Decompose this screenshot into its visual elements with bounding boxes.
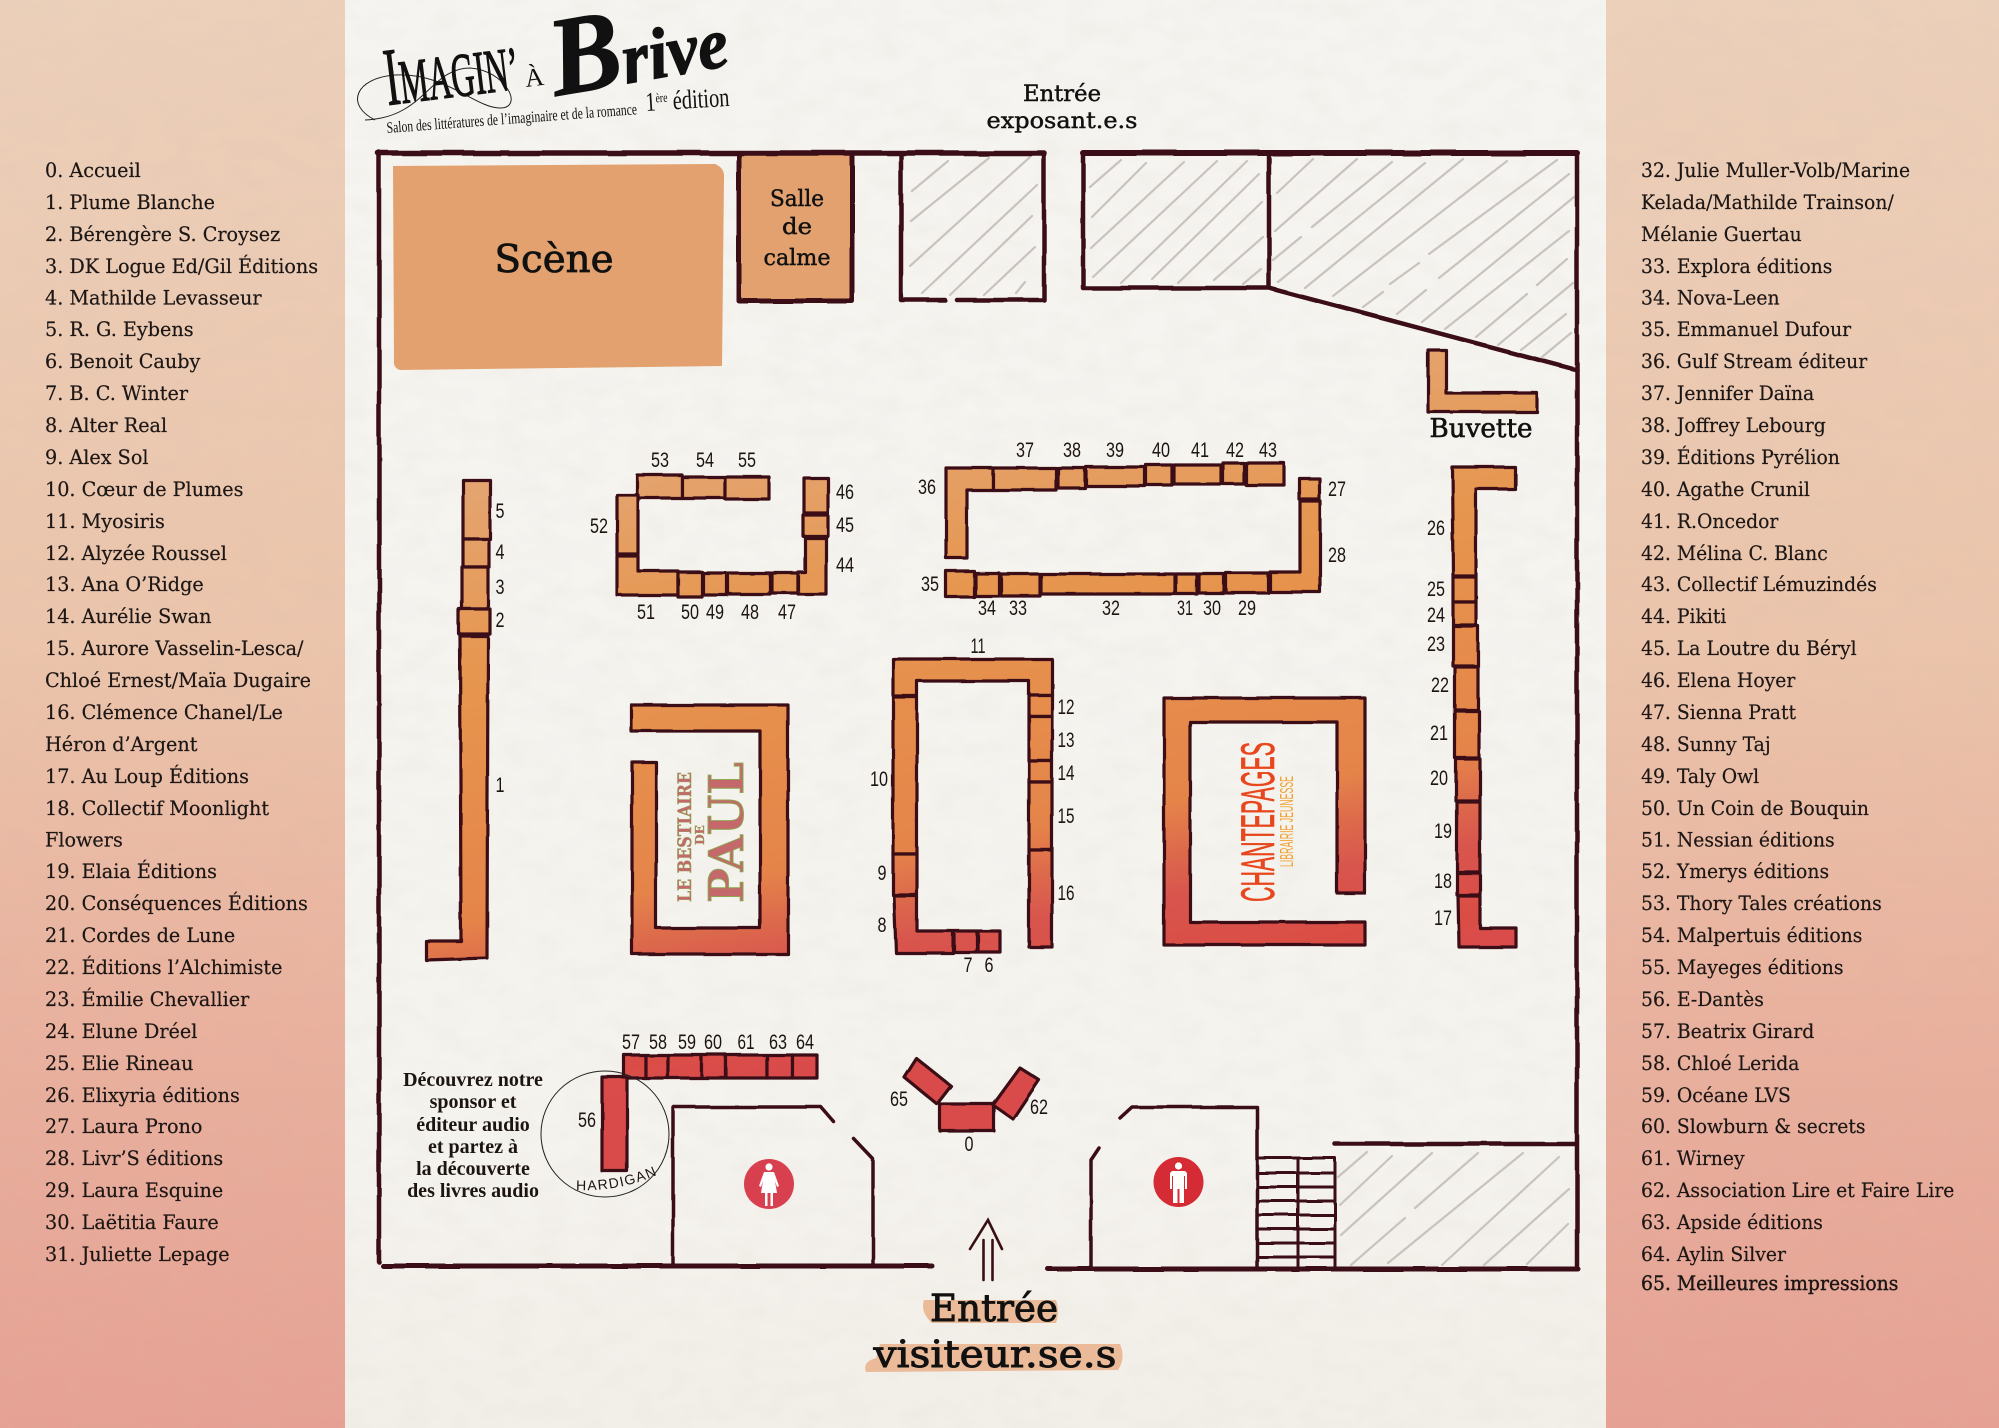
numbers: 55 <box>738 449 756 472</box>
partner booth: chantepages: CHANTEPAGES <box>1231 742 1284 902</box>
logo: Imagin': IMAGIN’ <box>379 18 523 124</box>
numbers: 14 <box>1058 762 1075 785</box>
numbers: 8 <box>878 914 886 937</box>
booths <box>1452 467 1516 947</box>
booth cluster: 44 to 55 <box>590 449 854 624</box>
numbers: 46 <box>836 481 854 504</box>
legend: right column: 43. Collectif Lémuzindés <box>1641 572 1877 596</box>
legend: left column: 22. Éditions l’Alchimiste <box>45 955 282 979</box>
numbers: 15 <box>1058 805 1074 828</box>
booths <box>617 475 828 597</box>
legend: right column: 56. E-Dantès <box>1641 987 1764 1011</box>
legend: left column: 18. Collectif Moonlight <box>45 797 269 820</box>
legend: left column: 26. Elixyria éditions <box>45 1084 240 1107</box>
legend: left column: Héron d’Argent <box>45 733 198 756</box>
legend: right column: 61. Wirney <box>1641 1146 1745 1170</box>
numbers <box>578 1031 814 1132</box>
panel: scène <box>393 164 724 370</box>
numbers: 38 <box>1063 439 1081 462</box>
numbers: 37 <box>1016 439 1034 462</box>
logo: subtitle: Salon des littératures de l’imaginaire et de la romance <box>386 101 638 137</box>
legend: left column: 11. Myosiris <box>45 510 165 533</box>
heading: entrée exposant: Entrée <box>1023 82 1101 107</box>
numbers: 51 <box>637 601 655 624</box>
logo: edition: ère <box>655 90 668 105</box>
numbers: 60 <box>704 1031 722 1054</box>
numbers: 9 <box>878 862 886 885</box>
icon: women's toilets <box>744 1159 794 1209</box>
legend: left column: 30. Laëtitia Faure <box>45 1211 219 1234</box>
booth outline <box>1164 698 1365 945</box>
numbers: 56 <box>578 1109 596 1132</box>
panel: salle de calme: calme <box>764 246 830 271</box>
legend: left column: 3. DK Logue Ed/Gil Éditions <box>45 254 318 278</box>
numbers: 64 <box>796 1031 814 1054</box>
numbers: 6 <box>984 954 994 977</box>
legend: left column: 24. Elune Dréel <box>45 1020 197 1043</box>
numbers: 59 <box>678 1031 696 1054</box>
legend: right column: 36. Gulf Stream éditeur <box>1641 349 1868 373</box>
legend: right column: Kelada/Mathilde Trainson/ <box>1641 190 1894 214</box>
icon: men's toilets <box>1154 1157 1204 1207</box>
numbers: 31 <box>1177 597 1193 620</box>
legend: right column: 57. Beatrix Girard <box>1641 1019 1814 1043</box>
numbers: 24 <box>1427 604 1445 627</box>
highlight second <box>865 1344 1123 1372</box>
numbers: 36 <box>918 476 936 499</box>
legend: left column: 16. Clémence Chanel/Le <box>45 701 283 724</box>
legend: left column: 10. Cœur de Plumes <box>45 478 243 501</box>
numbers: 47 <box>778 601 796 624</box>
heading: entrée exposant: exposant.e.s <box>986 109 1138 134</box>
numbers: 35 <box>921 573 939 596</box>
legend: right column <box>1641 158 1954 1295</box>
numbers: 2 <box>496 609 504 632</box>
numbers: 18 <box>1434 870 1452 893</box>
numbers <box>918 439 1346 620</box>
legend: right column: 52. Ymerys éditions <box>1641 859 1829 883</box>
legend: right column: 39. Éditions Pyrélion <box>1641 445 1840 469</box>
legend: left column: 15. Aurore Vasselin-Lesca/ <box>45 637 304 660</box>
heading: entrée visiteur <box>865 1287 1123 1376</box>
panel: scène: Scène <box>494 237 614 281</box>
visitor entrance text: Entrée <box>930 1287 1058 1330</box>
legend: left column: 4. Mathilde Levasseur <box>45 286 262 310</box>
legend: left column: 9. Alex Sol <box>45 446 149 469</box>
logo: infinity loop <box>358 68 511 120</box>
legend: right column: 47. Sienna Pratt <box>1641 700 1796 724</box>
hatched closed areas <box>910 157 1574 1265</box>
legend: right column: 40. Agathe Crunil <box>1641 477 1810 501</box>
numbers: 41 <box>1191 439 1209 462</box>
numbers: 11 <box>970 635 986 658</box>
numbers: 27 <box>1328 478 1346 501</box>
logo: de: DE <box>693 825 707 845</box>
booth cluster: 27 to 43 <box>918 439 1346 620</box>
highlight strokes <box>923 1300 1058 1323</box>
legend: left column: 13. Ana O’Ridge <box>45 573 204 596</box>
numbers: 12 <box>1058 696 1074 719</box>
booths <box>904 1058 1039 1131</box>
callout: sponsor text: la découverte <box>416 1158 530 1180</box>
booth cluster: 56 to 64 <box>578 1031 817 1171</box>
legend: left column <box>45 159 318 1266</box>
legend: right column: 34. Nova-Leen <box>1641 286 1780 310</box>
buvette label: Buvette <box>1430 414 1532 444</box>
legend: right column: 48. Sunny Taj <box>1641 732 1771 756</box>
legend: right column: 37. Jennifer Daïna <box>1641 381 1815 405</box>
callout: hardigan sponsor circle: HARDIGAN <box>577 1166 656 1190</box>
legend: right column: 55. Mayeges éditions <box>1641 955 1843 979</box>
legend: right column: 58. Chloé Lerida <box>1641 1051 1800 1075</box>
numbers: 28 <box>1328 544 1346 567</box>
heading: entrée exposant <box>986 82 1138 134</box>
callout: sponsor text <box>403 1069 543 1202</box>
numbers: 63 <box>769 1031 787 1054</box>
callout: sponsor text: éditeur audio <box>416 1114 530 1136</box>
booth cluster: buvette <box>1428 350 1537 444</box>
legend: right column: 32. Julie Muller-Volb/Marine <box>1641 158 1910 182</box>
numbers: 0 <box>964 1133 974 1156</box>
booths <box>946 463 1320 597</box>
numbers: 16 <box>1058 882 1074 905</box>
numbers: 19 <box>1434 820 1452 843</box>
legend: left column: 29. Laura Esquine <box>45 1179 223 1202</box>
logo <box>358 0 736 137</box>
numbers <box>890 1088 1048 1156</box>
numbers: 5 <box>496 500 504 523</box>
partner booth: chantepages <box>1164 698 1365 945</box>
legend: left column: 27. Laura Prono <box>45 1115 202 1138</box>
booth cluster: 17 to 26 <box>1427 467 1516 947</box>
numbers: 34 <box>978 597 996 620</box>
numbers: 49 <box>706 601 724 624</box>
numbers: 7 <box>964 954 972 977</box>
paper sheet <box>345 0 1606 1428</box>
numbers: 22 <box>1431 674 1449 697</box>
booths <box>893 659 1052 953</box>
numbers: 52 <box>590 515 608 538</box>
numbers: 44 <box>836 554 854 577</box>
legend: right column: 49. Taly Owl <box>1641 764 1759 788</box>
numbers: 62 <box>1030 1096 1048 1119</box>
visitor entrance text <box>872 1287 1116 1376</box>
numbers: 1 <box>496 774 504 797</box>
buvette counter <box>1428 350 1537 412</box>
panel: salle de calme: Salle <box>770 187 824 212</box>
logo: paul: PAUL <box>699 762 755 903</box>
visitor entrance text: visiteur.se.s <box>872 1333 1116 1376</box>
legend: left column: Flowers <box>45 828 123 852</box>
legend: right column: 44. Pikiti <box>1641 604 1726 628</box>
booth cluster: accueil 0, 62, 65 <box>890 1058 1048 1156</box>
logo: edition: édition <box>667 82 731 116</box>
numbers: 48 <box>741 601 759 624</box>
numbers: 33 <box>1009 597 1027 620</box>
numbers: 42 <box>1226 439 1244 462</box>
legend: left column: 23. Émilie Chevallier <box>45 987 250 1011</box>
legend: right column: 42. Mélina C. Blanc <box>1641 541 1828 565</box>
legend: left column: 14. Aurélie Swan <box>45 605 212 628</box>
numbers: 39 <box>1106 439 1124 462</box>
booths <box>426 480 490 960</box>
numbers: 29 <box>1238 597 1256 620</box>
legend: right column: 41. R.Oncedor <box>1641 509 1779 533</box>
legend: left column: 20. Conséquences Éditions <box>45 891 308 915</box>
callout: sponsor text: sponsor et <box>430 1091 517 1113</box>
booths <box>602 1055 817 1171</box>
legend: right column: 50. Un Coin de Bouquin <box>1641 796 1869 820</box>
numbers <box>496 500 505 797</box>
numbers: 65 <box>890 1088 908 1111</box>
legend: right column: 33. Explora éditions <box>1641 254 1832 278</box>
legend: right column: Mélanie Guertau <box>1641 222 1802 246</box>
numbers: 61 <box>738 1031 754 1054</box>
numbers: 58 <box>649 1031 667 1054</box>
numbers: 10 <box>870 768 888 791</box>
legend: right column: 35. Emmanuel Dufour <box>1641 317 1852 341</box>
booth cluster: 6 to 16 <box>870 635 1075 977</box>
callout: hardigan sponsor circle <box>540 1070 670 1198</box>
floor plan walls <box>378 152 1578 1269</box>
panel: salle de calme <box>741 154 852 300</box>
partner booth: chantepages: LIBRAIRIE JEUNESSE <box>1277 776 1297 867</box>
numbers: 4 <box>496 541 505 564</box>
callout: sponsor text: Découvrez notre <box>403 1069 543 1091</box>
numbers: 26 <box>1427 517 1445 540</box>
numbers <box>1427 517 1452 930</box>
logo: à: À <box>523 62 546 93</box>
legend: right column: 64. Aylin Silver <box>1641 1242 1787 1266</box>
numbers: 45 <box>836 514 854 537</box>
legend: left column: 7. B. C. Winter <box>45 382 189 405</box>
legend: left column: 25. Elie Rineau <box>45 1052 193 1075</box>
numbers: 17 <box>1434 907 1452 930</box>
legend: left column: Chloé Ernest/Maïa Dugaire <box>45 669 311 692</box>
legend: right column: 45. La Loutre du Béryl <box>1641 636 1857 660</box>
numbers: 30 <box>1203 597 1221 620</box>
legend: left column: 8. Alter Real <box>45 414 167 437</box>
numbers: 32 <box>1102 597 1120 620</box>
booth cluster: 1 to 5 <box>426 480 505 960</box>
arrow: visitor entrance <box>970 1220 1002 1280</box>
numbers: 50 <box>681 601 699 624</box>
legend: right column: 63. Apside éditions <box>1641 1210 1823 1234</box>
legend: right column: 60. Slowburn & secrets <box>1641 1114 1866 1138</box>
numbers: 21 <box>1430 722 1448 745</box>
logo: le bestiaire: LE BESTIAIRE <box>674 772 696 902</box>
booth outline <box>631 705 788 954</box>
legend: right column: 65. Meilleures impressions <box>1641 1271 1898 1295</box>
logo: edition: 1 <box>645 86 660 117</box>
numbers: 25 <box>1427 578 1445 601</box>
panel: salle de calme: de <box>782 215 812 240</box>
legend: left column: 6. Benoit Cauby <box>45 350 201 373</box>
numbers: 3 <box>496 576 504 599</box>
numbers: 40 <box>1152 439 1170 462</box>
numbers: 13 <box>1058 729 1074 752</box>
legend: right column: 62. Association Lire et Faire Lire <box>1641 1178 1954 1202</box>
numbers: 54 <box>696 449 714 472</box>
partner booth: le bestiaire de paul <box>631 705 788 954</box>
legend: left column: 5. R. G. Eybens <box>45 318 194 341</box>
numbers: 20 <box>1430 767 1448 790</box>
legend: left column: 31. Juliette Lepage <box>45 1243 230 1266</box>
legend: right column: 46. Elena Hoyer <box>1641 668 1796 692</box>
numbers: 43 <box>1259 439 1277 462</box>
legend: right column: 51. Nessian éditions <box>1641 828 1835 852</box>
numbers: 53 <box>651 449 669 472</box>
legend: right column: 54. Malpertuis éditions <box>1641 923 1862 947</box>
legend: right column: 38. Joffrey Lebourg <box>1641 413 1826 437</box>
callout: sponsor text: et partez à <box>428 1136 518 1158</box>
numbers <box>590 449 854 624</box>
legend: right column: 59. Océane LVS <box>1641 1083 1791 1107</box>
callout: sponsor text: des livres audio <box>407 1180 539 1202</box>
numbers: 57 <box>622 1031 640 1054</box>
legend: left column: 17. Au Loup Éditions <box>45 764 249 788</box>
legend: left column: 12. Alyzée Roussel <box>45 542 227 565</box>
legend: left column: 28. Livr’S éditions <box>45 1147 223 1170</box>
legend: right column: 53. Thory Tales créations <box>1641 891 1882 915</box>
legend: left column: 2. Bérengère S. Croysez <box>45 223 280 246</box>
legend: left column: 19. Elaia Éditions <box>45 859 217 883</box>
legend: left column: 21. Cordes de Lune <box>45 924 235 947</box>
numbers: 23 <box>1427 633 1445 656</box>
legend: left column: 1. Plume Blanche <box>45 191 215 214</box>
legend: left column: 0. Accueil <box>45 159 141 182</box>
numbers <box>870 635 1075 977</box>
